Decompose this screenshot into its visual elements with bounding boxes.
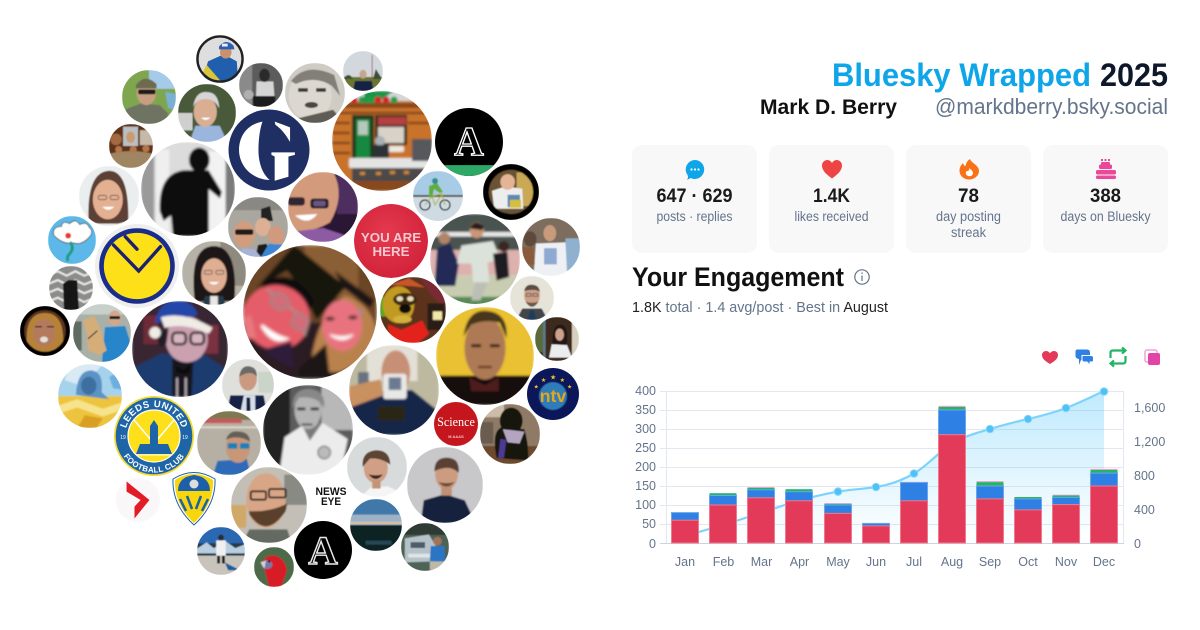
logo: Guardian G — [228, 110, 310, 190]
area: cumulative engagement fill — [685, 391, 1104, 543]
title: Bluesky Wrapped 2025: 2025 — [1100, 57, 1168, 93]
bars: Sep — [976, 481, 1004, 543]
month labels: Aug — [941, 555, 963, 569]
avatar: man in navy shirt — [407, 447, 483, 523]
bars: Mar — [748, 487, 774, 543]
heading: display name: Mark D. Berry — [760, 95, 897, 119]
logo: The Athletic A with green band: A — [454, 119, 484, 164]
avatar: blonde woman grimacing in black ring — [20, 306, 70, 356]
panel: posts and replies: 647 · 629 — [656, 186, 732, 207]
avatar: dark figure on patterned wall — [49, 266, 93, 310]
logo: red chevron — [116, 478, 160, 522]
right axis labels: 0 — [1134, 537, 1141, 551]
logo: ntv globe with stars: ★ — [534, 383, 539, 390]
left axis labels: 50 — [642, 517, 656, 531]
avatar: smiling woman with glasses — [79, 166, 139, 226]
left axis labels: 400 — [635, 384, 656, 398]
line markers — [834, 388, 1108, 495]
panel: likes received: 1.4K — [813, 186, 850, 207]
avatar: woman with dark curly hair — [182, 241, 246, 305]
logo: Science journal: M AAAS — [448, 434, 464, 439]
logo: News Eye: NEWS — [316, 486, 346, 498]
avatar: man in dark shirt on grey — [347, 437, 407, 497]
avatar: man beside armoured vehicle — [401, 523, 449, 571]
logo: The Athletic A with green band — [435, 108, 503, 177]
panel: likes received: likes received — [794, 209, 868, 224]
month labels: Jun — [866, 555, 886, 569]
logo: The Athletic A black — [294, 521, 352, 579]
left axis labels: 250 — [635, 441, 656, 455]
icon: likes heart — [1042, 351, 1058, 364]
avatar: black dog in Leeds scarf — [480, 404, 540, 464]
avatar: men with printed t-shirt — [522, 218, 580, 276]
month labels: Apr — [790, 555, 809, 569]
logo: Leeds United Football Club crest — [114, 396, 194, 476]
avatar: black and white older man — [285, 63, 345, 123]
avatar: group with poster — [109, 124, 153, 168]
avatar: central selfie in graduation caps — [234, 245, 377, 379]
panel: days on Bluesky: days on Bluesky — [1060, 209, 1151, 224]
icon: reposts arrows — [1110, 348, 1126, 366]
icon: birthday cake — [1096, 159, 1116, 179]
bars: Oct — [1014, 497, 1042, 543]
bars: Jul — [900, 482, 928, 543]
bars: Apr — [786, 489, 812, 543]
right axis labels: 400 — [1134, 503, 1155, 517]
logo: Yorkshire white rose — [48, 216, 96, 264]
avatar: three men selfie — [228, 197, 288, 257]
panel: day posting streak: day posting — [936, 209, 1001, 224]
avatar: woman in white shirt at window — [535, 317, 579, 361]
left axis labels: 0 — [649, 537, 656, 551]
avatar: bald man drinking from mug — [349, 345, 439, 435]
month labels: Nov — [1055, 555, 1078, 569]
month labels: May — [826, 555, 851, 569]
logo: Science journal — [434, 402, 478, 446]
logo: News Eye: EYE — [321, 496, 341, 508]
avatar: bald bearded man with glasses — [231, 467, 307, 543]
avatar: man in blue sunglasses — [197, 411, 261, 475]
icon: quotes squares — [1145, 350, 1160, 365]
month labels: Jan — [675, 555, 695, 569]
avatar: man with flagpole and trees — [343, 51, 383, 93]
logo: Leeds United Football Club crest: 19 — [182, 435, 188, 441]
logo: ntv globe with stars: ntv — [540, 386, 566, 406]
icon: heart — [822, 160, 842, 178]
logo: Leeds United Football Club crest: FOOTBALL CLUB — [124, 453, 184, 473]
left axis labels: 200 — [635, 460, 656, 474]
badge: You Are Here: HERE — [372, 244, 410, 259]
heading: Your Engagement: Your Engagement — [632, 262, 844, 292]
right axis labels: 800 — [1134, 469, 1155, 483]
avatar: man in cap and sunglasses — [122, 70, 176, 124]
bars: Dec — [1090, 469, 1118, 543]
left axis labels: 100 — [635, 498, 656, 512]
right axis labels: 1,200 — [1134, 435, 1165, 449]
logo: News Eye — [316, 486, 346, 508]
left axis labels: 300 — [635, 422, 656, 436]
logo: ntv globe with stars: ★ — [550, 373, 556, 381]
avatar: bald man with thick glasses — [288, 172, 358, 242]
icon: flame — [960, 159, 979, 180]
panel: day posting streak — [906, 145, 1031, 253]
avatar: red parrot — [254, 547, 294, 587]
logo: Leeds United Football Club crest: LEEDS UNITED — [120, 400, 187, 428]
avatar: yellow cartoon bear with red bow tie — [380, 277, 446, 343]
bars: Feb — [710, 493, 736, 543]
badge: You Are Here — [354, 204, 428, 278]
badge: You Are Here: YOU ARE — [361, 230, 421, 245]
avatar: black and white footballer in Leeds kit — [263, 385, 353, 475]
month labels — [675, 555, 1115, 569]
left axis labels — [635, 384, 656, 551]
legend icons — [1042, 348, 1160, 366]
logo: Leeds United Football Club crest: 19 — [120, 435, 126, 441]
panel: day posting streak: streak — [951, 225, 986, 240]
month labels: Jul — [906, 555, 922, 569]
panel: days on Bluesky: 388 — [1090, 186, 1121, 207]
panel: posts and replies: posts · replies — [656, 209, 733, 224]
avatar: footballers on pitch — [430, 214, 520, 306]
avatar: man holding dog — [73, 304, 131, 362]
panel: days on Bluesky — [1043, 145, 1168, 253]
avatar: silhouette at door — [141, 142, 235, 236]
icon: replies bubbles — [1076, 350, 1094, 366]
month labels: Oct — [1018, 555, 1038, 569]
bars: Jun — [862, 523, 890, 543]
avatar: figure on snowy viewpoint — [197, 527, 245, 575]
text: engagement summary: 1.8K total · 1.4 avg/post · Best in August — [632, 299, 889, 316]
avatar: blue and yellow flag portrait — [58, 364, 122, 428]
chart: monthly engagement combo — [635, 384, 1165, 569]
logo: The Athletic A black: A — [308, 528, 338, 573]
bars: Jan — [672, 513, 698, 543]
avatar: man in blue Santa hat — [132, 301, 228, 397]
avatar: dusk landscape — [350, 499, 402, 551]
left axis labels: 150 — [635, 479, 656, 493]
panel: likes received — [769, 145, 894, 253]
logo: Leeds United shield — [173, 472, 215, 525]
logo: Leeds smiley badge — [95, 224, 179, 308]
right axis labels: 1,600 — [1134, 401, 1165, 415]
bars: Nov — [1052, 495, 1080, 543]
icon: chat bubble — [686, 160, 704, 180]
avatar bubble cluster — [20, 35, 580, 587]
logo: ntv globe with stars — [527, 368, 579, 420]
icon: info — [855, 270, 869, 284]
line: cumulative engagement — [685, 391, 1104, 536]
logo: ntv globe with stars: ★ — [541, 377, 546, 384]
avatar: man with beard and tie — [510, 276, 554, 320]
avatar: man with yellow backdrop — [436, 307, 534, 405]
panel: posts and replies — [632, 145, 757, 253]
avatar: man with trophy in black ring — [483, 164, 539, 220]
month labels: Mar — [751, 555, 772, 569]
avatar: lego log cabin — [332, 91, 432, 191]
avatar: black and white man — [239, 63, 283, 107]
logo: ntv globe with stars: ★ — [560, 377, 565, 384]
logo: Science journal: Science — [437, 415, 475, 429]
month labels: Feb — [713, 555, 734, 569]
title: Bluesky Wrapped 2025: Bluesky Wrapped — [832, 57, 1091, 93]
month labels: Sep — [979, 555, 1001, 569]
month labels: Dec — [1093, 555, 1115, 569]
bars: Aug — [938, 406, 966, 543]
avatar: cyclist on shore — [413, 171, 463, 222]
avatar: man in suit smiling — [222, 359, 274, 411]
right axis labels — [1134, 401, 1165, 551]
avatar: man in blue cap and jacket — [196, 35, 244, 83]
left axis labels: 350 — [635, 403, 656, 417]
panel: day posting streak: 78 — [958, 186, 979, 207]
grid lines — [660, 391, 1124, 543]
logo: ntv globe with stars: ★ — [567, 383, 572, 390]
heading: handle: @markdberry.bsky.social — [935, 94, 1168, 119]
avatar: smiling older man in checked shirt — [178, 84, 236, 142]
bars: May — [824, 503, 852, 543]
